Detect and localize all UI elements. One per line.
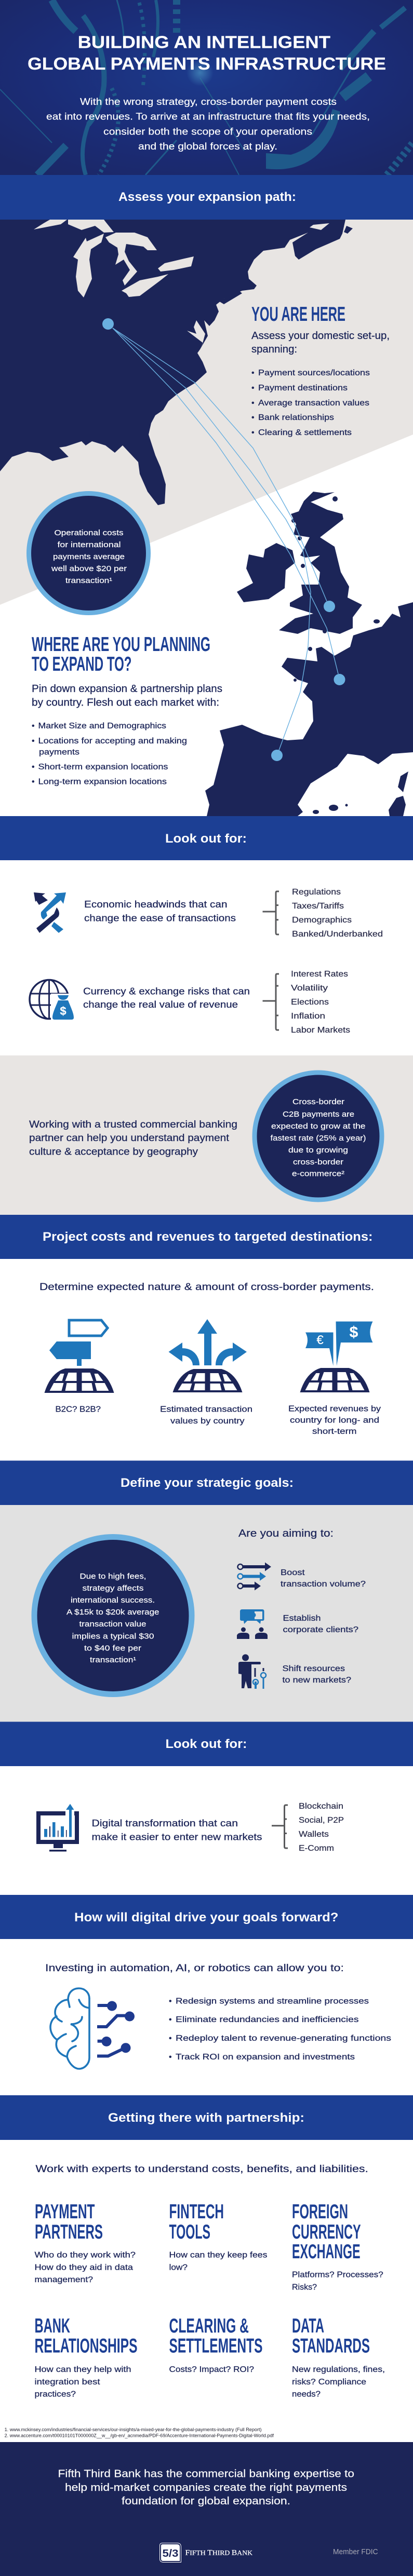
list: currency factors: Elections — [291, 998, 329, 1007]
callout: high fees — [31, 1534, 194, 1697]
list: market factors: • — [32, 763, 35, 771]
caption: B2C or B2B: B2C? B2B? — [55, 1405, 101, 1414]
list: domestic factors: Payment destinations — [258, 384, 348, 392]
text: member FDIC: Member FDIC — [333, 2548, 378, 2556]
list: digital benefits: Eliminate redundancies and inefficiencies — [176, 2015, 358, 2024]
list: domestic factors: Clearing & settlements — [258, 428, 352, 437]
caption: estimated transaction values: Estimated transaction — [160, 1405, 252, 1414]
heading: you are here: YOU ARE HERE — [251, 303, 345, 326]
text: currency risks — [83, 985, 250, 1010]
intro text: With the wrong strategy, cross-border payment costs — [80, 96, 337, 107]
panel: digital transformation — [38, 1802, 344, 1853]
text: economic headwinds — [84, 899, 236, 923]
card: fintech tools: low? — [169, 2263, 188, 2272]
text: working with a partner — [29, 1119, 237, 1158]
list: market factors: • — [32, 778, 35, 787]
caption: estimated transaction values: values by country — [170, 1417, 244, 1426]
heading: are you aiming to: Are you aiming to: — [238, 1528, 334, 1539]
card: payment partners — [34, 2201, 136, 2284]
card: payment partners: PARTNERS — [35, 2221, 103, 2243]
footnotes: 1. www.mckinsey.com/industries/financial-services/our-insights/a-mixed-year-for-the-global-payments-industry (Full Report) — [5, 2427, 262, 2433]
panel: project costs content — [39, 1282, 381, 1436]
card: foreign currency exchange: Platforms? Processes? — [292, 2271, 383, 2279]
text: digital transformation: Digital transformation that can — [91, 1818, 238, 1828]
text: establish corporate clients: Establish — [283, 1614, 321, 1623]
card: fintech tools — [169, 2201, 267, 2272]
card: data standards: DATA — [292, 2315, 324, 2337]
list: domestic factors: • — [251, 384, 255, 392]
list: digital factors: Blockchain — [299, 1802, 343, 1811]
list: digital benefits: • — [169, 2053, 172, 2062]
list: currency factors — [291, 970, 350, 1035]
band: look out for 1: Look out for: — [165, 832, 247, 846]
card: foreign currency exchange: EXCHANGE — [292, 2241, 361, 2263]
card: foreign currency exchange — [292, 2201, 383, 2292]
text: shift resources: to new markets? — [283, 1676, 351, 1685]
card: clearing and settlements — [169, 2315, 263, 2374]
icon: currency flags on globe: € — [316, 1333, 324, 1347]
callout: C2B payments: expected to grow at the — [271, 1122, 366, 1131]
caption: estimated transaction values — [160, 1405, 252, 1426]
callout: high fees: strategy affects — [82, 1584, 143, 1593]
list: domestic factors: Payment sources/locations — [258, 369, 370, 377]
intro text: consider both the scope of your operations — [103, 126, 312, 137]
text: currency risks: Currency & exchange risks that can — [83, 985, 250, 997]
callout: C2B payments: e-commerce² — [292, 1170, 344, 1178]
callout: operational costs: Operational costs — [54, 529, 124, 537]
list: digital factors — [299, 1802, 344, 1853]
list: currency factors: Interest Rates — [291, 970, 348, 979]
callout: C2B payments: Cross-border — [292, 1098, 344, 1106]
list: digital factors: Wallets — [299, 1830, 329, 1839]
panel: digital goals — [45, 1963, 391, 2069]
caption: expected revenues: short-term — [312, 1427, 356, 1436]
heading: where are you planning — [32, 633, 210, 675]
caption: expected revenues: Expected revenues by — [288, 1404, 381, 1413]
card: clearing and settlements: SETTLEMENTS — [169, 2335, 263, 2357]
callout: high fees: to $40 fee per — [84, 1645, 141, 1653]
card: payment partners: Who do they work with? — [34, 2251, 136, 2259]
card: fintech tools: How can they keep fees — [169, 2251, 267, 2259]
heading: where are you planning: WHERE ARE YOU PLANNING — [32, 633, 210, 656]
list: digital factors: Social, P2P — [299, 1816, 344, 1825]
panel: footer — [0, 2442, 413, 2576]
text: establish corporate clients: corporate clients? — [283, 1625, 358, 1634]
footnotes: 2. www.accenture.com/t00010101T000000Z__w__/gb-en/_acnmedia/PDF-69/Accenture-International-Payments-Digital-World.pdf — [5, 2433, 274, 2439]
icon: globe and money bag — [30, 980, 76, 1022]
callout: C2B payments — [252, 1070, 384, 1202]
text: shift resources — [283, 1664, 351, 1685]
list: digital benefits: Redesign systems and streamline processes — [176, 1997, 369, 2005]
list: digital benefits: • — [169, 2015, 172, 2024]
text: pin down expansion — [32, 683, 222, 708]
text: investing in automation: Investing in automation, AI, or robotics can allow you to: — [45, 1963, 344, 1974]
panel: strategic goals — [0, 1505, 413, 1721]
bracket: economic factors — [263, 891, 279, 934]
list: currency factors: Volatility — [291, 984, 328, 993]
text: boost transaction volume: transaction volume? — [281, 1580, 366, 1589]
card: bank relationships: practices? — [34, 2390, 76, 2399]
map: continental Europe — [205, 602, 413, 816]
text: economic headwinds: change the ease of transactions — [84, 913, 236, 923]
logo: Fifth Third Bank — [160, 2543, 253, 2563]
band: how will digital drive — [0, 1895, 413, 1939]
card: bank relationships: RELATIONSHIPS — [34, 2335, 137, 2357]
intro text: eat into revenues. To arrive at an infrastructure that fits your needs, — [46, 111, 370, 122]
heading: where are you planning: TO EXPAND TO? — [32, 653, 132, 675]
list: market factors: • — [32, 722, 35, 730]
list: domestic factors: • — [251, 399, 255, 408]
text: closing statement: help mid-market companies create the right payments — [65, 2482, 347, 2493]
icon: three arrows on globe — [168, 1319, 247, 1392]
list: domestic factors: • — [251, 413, 255, 422]
card: fintech tools: TOOLS — [169, 2221, 210, 2243]
text: digital transformation: make it easier to enter new markets — [91, 1831, 262, 1842]
callout: operational costs: transaction¹ — [65, 577, 112, 585]
text: work with experts: Work with experts to understand costs, benefits, and liabilities. — [35, 2164, 368, 2175]
text: currency risks: change the real value of revenue — [83, 999, 238, 1010]
icon: currency flags on globe — [300, 1322, 373, 1392]
list: market factors: Market Size and Demographics — [38, 722, 166, 730]
callout: high fees: Due to high fees, — [80, 1572, 146, 1581]
icon: volume arrows — [238, 1563, 271, 1591]
map: North America — [0, 220, 353, 505]
band: define your strategic goals — [0, 1461, 413, 1505]
icon: currency flags on globe: $ — [350, 1324, 358, 1341]
list: market factors: • — [32, 737, 35, 745]
card: foreign currency exchange: FOREIGN — [292, 2201, 348, 2223]
card: foreign currency exchange: CURRENCY — [292, 2221, 361, 2243]
title: GLOBAL PAYMENTS INFRASTRUCTURE — [28, 55, 386, 74]
list: digital benefits: • — [169, 2034, 172, 2043]
title — [28, 33, 386, 74]
card: data standards — [292, 2315, 385, 2399]
card: data standards: needs? — [292, 2390, 321, 2399]
list: currency factors: Inflation — [291, 1012, 325, 1021]
text: assess domestic set-up — [251, 330, 390, 355]
map: United Kingdom and Ireland — [237, 492, 362, 634]
band: getting there with partnership — [0, 2095, 413, 2140]
callout: operational costs — [26, 491, 151, 615]
panel: partnership grid — [5, 2164, 385, 2439]
callout: C2B payments: C2B payments are — [283, 1110, 354, 1119]
text: boost transaction volume: Boost — [281, 1568, 305, 1577]
list: domestic factors: • — [251, 428, 255, 437]
text: working with a partner: culture & acceptance by geography — [29, 1146, 198, 1158]
card: bank relationships: integration best — [34, 2378, 100, 2387]
text: pin down expansion: by country. Flesh out each market with: — [32, 697, 219, 708]
band: look out for 1 — [0, 816, 413, 860]
panel: header — [0, 0, 413, 175]
card: clearing and settlements: CLEARING & — [169, 2315, 249, 2337]
band: project costs: Project costs and revenues to targeted destinations: — [43, 1230, 373, 1244]
callout: C2B payments: fastest rate (25% a year) — [270, 1134, 366, 1143]
band: getting there with partnership: Getting there with partnership: — [108, 2111, 304, 2125]
callout: operational costs: payments average — [53, 553, 125, 561]
text: closing statement — [58, 2469, 354, 2507]
logo: Fifth Third Bank: 5/3 — [162, 2548, 179, 2559]
list: domestic factors: Average transaction values — [258, 399, 369, 408]
bracket: currency factors — [263, 974, 279, 1030]
icon: crossing arrows — [34, 892, 66, 933]
text: determine expected nature: Determine expected nature & amount of cross-border payments. — [39, 1282, 374, 1293]
list: market factors: Locations for accepting and making — [38, 737, 187, 745]
list: economic factors: Banked/Underbanked — [292, 930, 383, 939]
list: economic factors: Demographics — [292, 916, 352, 925]
caption: expected revenues: country for long- and — [290, 1416, 379, 1425]
card: payment partners: management? — [34, 2275, 93, 2284]
icon: globe and money bag: $ — [60, 1005, 66, 1018]
list: digital benefits: Redeploy talent to revenue-generating functions — [176, 2034, 391, 2043]
text: digital transformation — [91, 1818, 262, 1842]
list: domestic factors: • — [251, 369, 255, 377]
text: shift resources: Shift resources — [283, 1664, 345, 1673]
text: assess domestic set-up: spanning: — [251, 344, 297, 355]
list: domestic factors: Bank relationships — [258, 413, 334, 422]
card: bank relationships: How can they help with — [34, 2365, 131, 2374]
card: data standards: risks? Compliance — [292, 2378, 366, 2387]
panel: look out for items — [30, 888, 383, 1035]
icon: corporate clients — [237, 1609, 268, 1639]
band: look out for 2 — [0, 1721, 413, 1766]
panel: expansion map — [0, 220, 413, 816]
card: foreign currency exchange: Risks? — [292, 2283, 317, 2292]
list: digital factors: E-Comm — [299, 1844, 334, 1853]
callout: operational costs: well above $20 per — [51, 565, 127, 573]
logo: Fifth Third Bank: FIFTH THIRD BANK — [185, 2549, 253, 2557]
band: project costs — [0, 1215, 413, 1259]
callout: high fees: A $15k to $20k average — [66, 1608, 159, 1617]
list: market factors: Short-term expansion locations — [38, 763, 168, 771]
card: payment partners: How do they aid in data — [34, 2263, 133, 2272]
card: payment partners: PAYMENT — [35, 2201, 95, 2223]
callout: high fees: international success. — [71, 1596, 155, 1605]
list: economic factors: Regulations — [292, 888, 341, 897]
card: bank relationships — [34, 2315, 137, 2399]
card: bank relationships: BANK — [34, 2315, 70, 2337]
icon: signpost on globe — [45, 1320, 114, 1393]
list: economic factors: Taxes/Tariffs — [292, 902, 344, 911]
footnotes — [5, 2427, 274, 2439]
card: fintech tools: FINTECH — [169, 2201, 224, 2223]
callout: high fees: transaction¹ — [90, 1656, 136, 1664]
callout: high fees: implies a typical $30 — [72, 1632, 154, 1640]
list: digital benefits — [169, 1997, 391, 2062]
icon: person with sliders — [238, 1654, 266, 1689]
band: assess your expansion path: Assess your expansion path: — [118, 190, 296, 204]
title: BUILDING AN INTELLIGENT — [78, 33, 331, 52]
text: closing statement: foundation for global expansion. — [122, 2496, 290, 2507]
band: how will digital drive: How will digital drive your goals forward? — [74, 1910, 339, 1924]
list: digital benefits: • — [169, 1997, 172, 2005]
list: economic factors — [292, 888, 383, 939]
text: boost transaction volume — [281, 1568, 366, 1589]
text: closing statement: Fifth Third Bank has the commercial banking expertise to — [58, 2469, 354, 2480]
list: market factors: payments — [39, 748, 79, 757]
text: working with a partner: Working with a trusted commercial banking — [29, 1119, 237, 1130]
text: working with a partner: partner can help you understand payment — [29, 1133, 230, 1144]
callout: high fees: transaction value — [79, 1620, 146, 1629]
list: digital benefits: Track ROI on expansion and investments — [176, 2053, 355, 2062]
callout: operational costs: for international — [57, 541, 121, 549]
icon: monitor with rising chart — [38, 1804, 77, 1851]
map: location dots — [102, 318, 345, 761]
card: data standards: New regulations, fines, — [292, 2365, 385, 2374]
list: domestic factors — [251, 369, 370, 437]
callout: C2B payments: cross-border — [293, 1158, 343, 1167]
text: pin down expansion: Pin down expansion & partnership plans — [32, 683, 222, 695]
map: route lines — [113, 328, 338, 750]
text: economic headwinds: Economic headwinds that can — [84, 899, 228, 910]
list: market factors: Long-term expansion locations — [38, 778, 167, 787]
callout: C2B payments: due to growing — [288, 1146, 348, 1155]
intro text: and the global forces at play. — [138, 141, 277, 152]
icon: brain circuit — [50, 1988, 135, 2069]
list: market factors — [32, 722, 187, 787]
intro text — [46, 96, 370, 152]
text: establish corporate clients — [283, 1614, 358, 1634]
bracket: digital factors — [272, 1805, 288, 1848]
list: currency factors: Labor Markets — [291, 1026, 350, 1035]
card: clearing and settlements: Costs? Impact? ROI? — [169, 2365, 254, 2374]
band: assess your expansion path — [0, 175, 413, 220]
panel: banking partner — [0, 1055, 413, 1215]
band: define your strategic goals: Define your strategic goals: — [121, 1476, 294, 1490]
text: assess domestic set-up: Assess your domestic set-up, — [251, 330, 390, 342]
band: look out for 2: Look out for: — [165, 1737, 247, 1751]
caption: expected revenues — [288, 1404, 381, 1436]
